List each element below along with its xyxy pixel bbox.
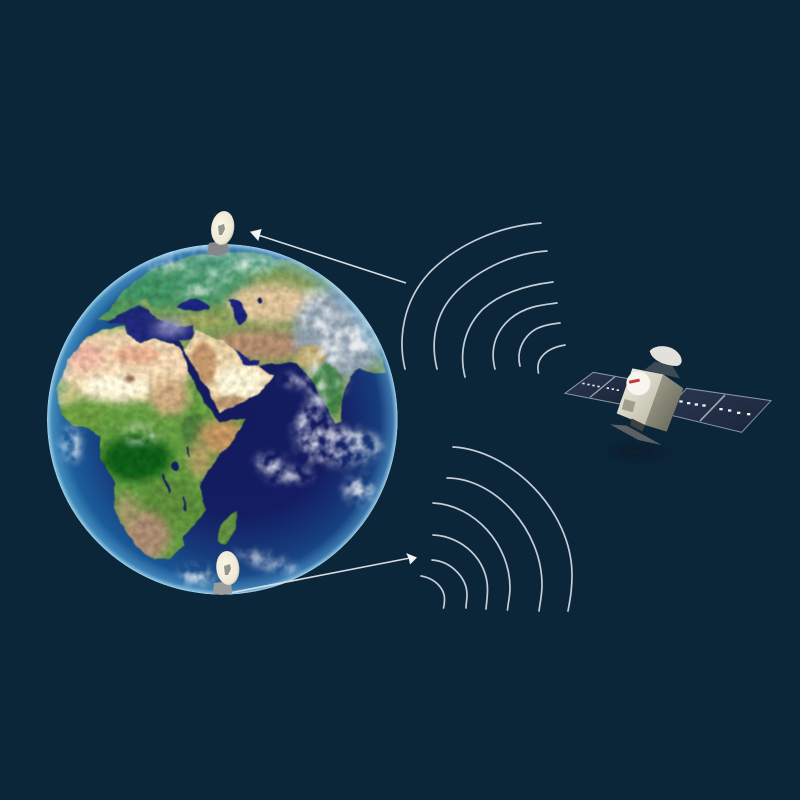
lower signal waves [421, 447, 572, 611]
seas: mediterranean, black sea, caspian, persian gulf [107, 298, 262, 368]
body side face [645, 374, 683, 432]
great lakes [162, 447, 190, 512]
satellite shadow [610, 446, 663, 458]
infographic: satellite signals and earth [47, 211, 772, 612]
bottom arrow [232, 553, 417, 592]
globe [47, 244, 398, 595]
body front face [617, 368, 663, 425]
dish base [213, 581, 232, 595]
left solar panel [565, 372, 630, 404]
right solar panel [663, 388, 771, 432]
upper signal waves [402, 223, 565, 377]
top dish antenna [207, 210, 236, 256]
clouds [62, 245, 382, 587]
madagascar [218, 510, 238, 544]
dish reflector [215, 550, 241, 586]
bottom dish antenna [213, 550, 241, 595]
body cylinder with logo [626, 371, 650, 395]
body vent [622, 399, 636, 412]
dish feed [218, 224, 225, 235]
bottom dish [610, 424, 662, 445]
top dome antenna [650, 346, 682, 366]
land: africa [56, 324, 246, 560]
land masses [50, 247, 393, 567]
top arrow [250, 229, 406, 283]
ocean [47, 244, 398, 595]
dish base [207, 240, 229, 256]
satellite truss [644, 362, 680, 378]
land: eurasia [98, 251, 386, 424]
dish reflector [209, 210, 236, 246]
dish feed [224, 564, 231, 575]
satellite [565, 346, 771, 458]
land: arabia [184, 330, 275, 414]
atmosphere rim [47, 244, 398, 595]
